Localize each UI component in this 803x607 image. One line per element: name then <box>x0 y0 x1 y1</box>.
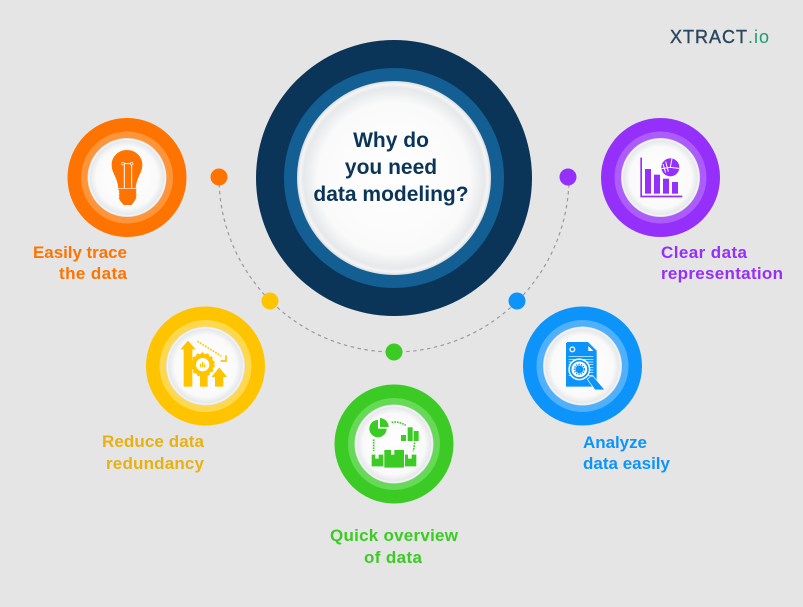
icon: document with magnifier <box>566 342 605 390</box>
connector dot: green <box>386 344 402 360</box>
connector dot: blue <box>508 292 526 310</box>
badge: reduce data redundancy <box>146 306 265 426</box>
label: analyze data easily: data easily <box>583 454 671 473</box>
label: quick overview of data: Quick overview <box>330 526 459 545</box>
central title: Why do <box>353 129 429 152</box>
label: analyze data easily: Analyze <box>583 433 647 452</box>
badge: quick overview of data <box>334 384 454 504</box>
icon: light bulb <box>112 150 142 205</box>
icon: bar chart and pie <box>640 158 682 197</box>
label: reduce data redundancy: redundancy <box>106 454 205 473</box>
icon: pie, bars and boxes <box>369 418 419 468</box>
central title: data modeling? <box>313 183 469 206</box>
connector dot: purple <box>560 168 576 186</box>
central title: you need <box>345 156 437 179</box>
icon: arrows and gear <box>180 341 227 387</box>
label: reduce data redundancy: Reduce data <box>102 432 205 451</box>
central circle <box>256 40 532 316</box>
label: clear data representation: Clear data <box>661 243 748 262</box>
badge: analyze data easily <box>523 306 642 426</box>
label: easily trace the data: Easily trace <box>33 243 127 262</box>
logo: XTRACT <box>670 27 747 47</box>
badge: clear data representation <box>601 118 720 237</box>
label: quick overview of data: of data <box>364 548 423 567</box>
label: easily trace the data: the data <box>59 264 128 283</box>
connector dot: orange <box>210 168 228 186</box>
badge: easily trace the data <box>68 118 186 237</box>
connector dot: yellow <box>262 292 278 310</box>
dashed connector arc <box>219 177 569 352</box>
logo: .io <box>748 27 769 47</box>
label: clear data representation: representation <box>661 264 783 283</box>
